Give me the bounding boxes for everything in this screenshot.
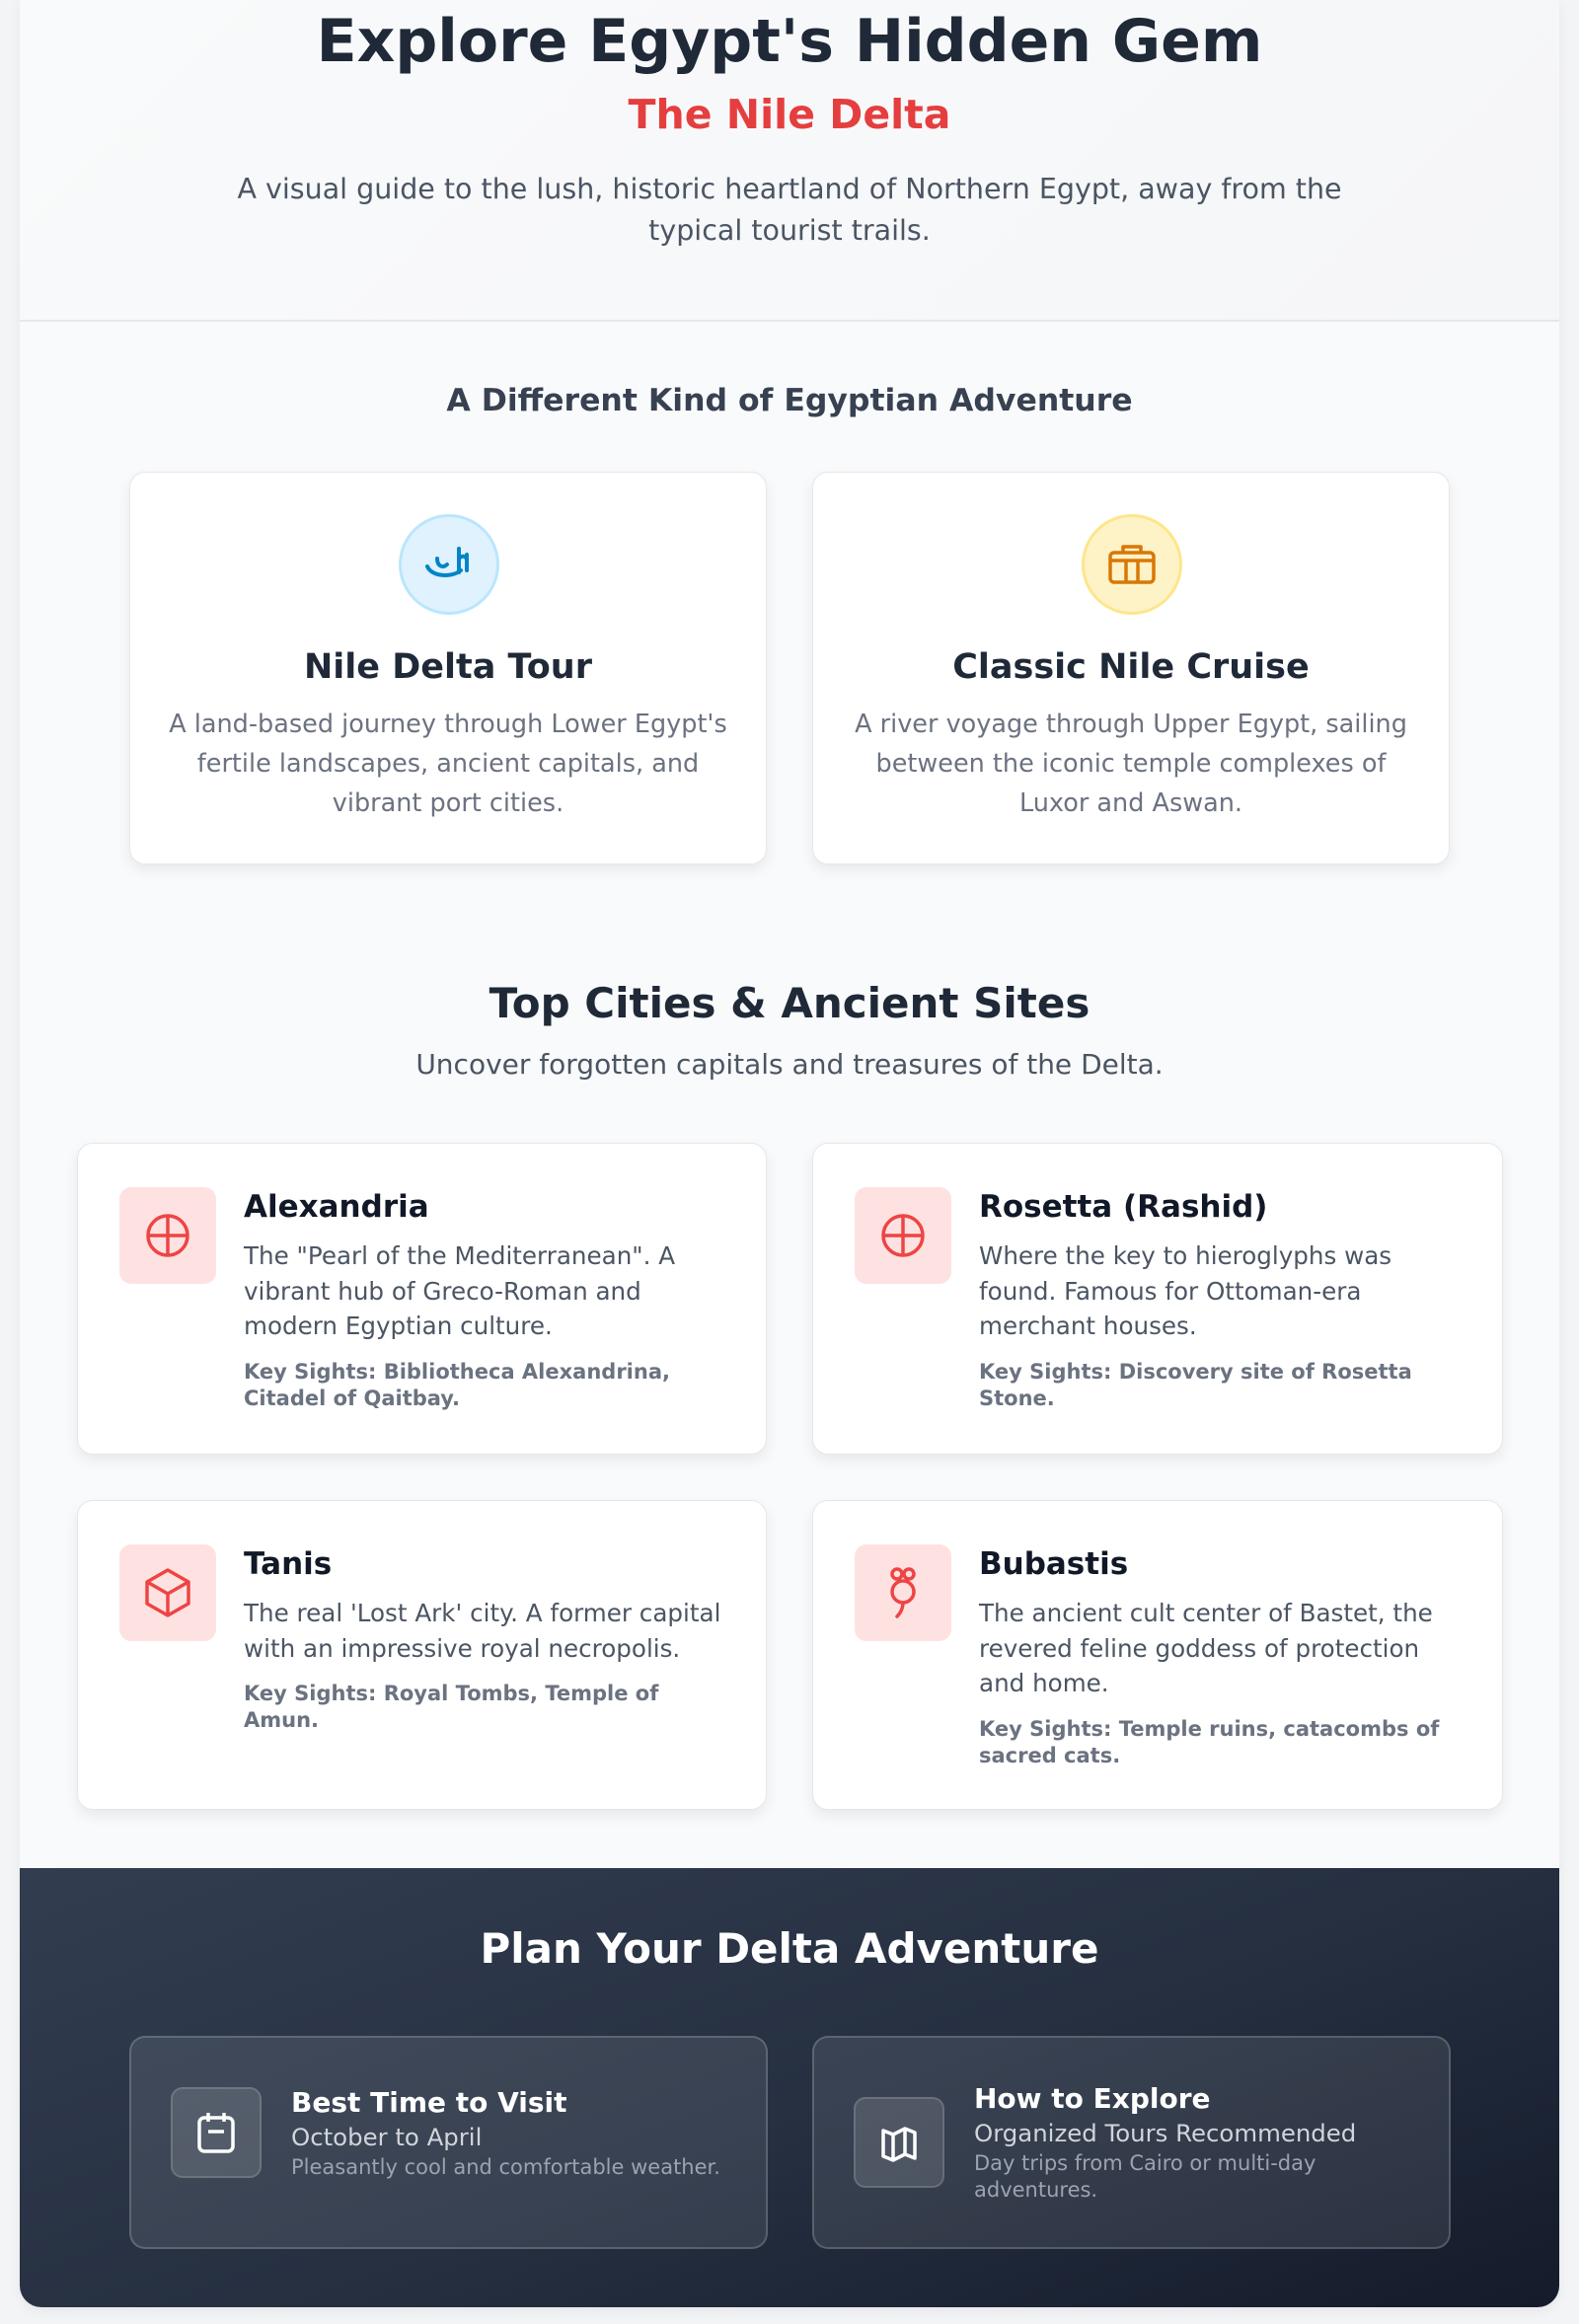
icon <box>119 1187 216 1284</box>
city card: Alexandria <box>77 1143 767 1455</box>
title: Rosetta (Rashid) <box>979 1189 1267 1225</box>
description: The "Pearl of the Mediterranean". A vibrant hub of Greco-Roman and modern Egyptian culture. <box>244 1241 675 1340</box>
description: The ancient cult center of Bastet, the revered feline goddess of protection and home. <box>979 1599 1433 1697</box>
dark section: plan <box>20 1868 1559 2307</box>
icon <box>855 1187 951 1284</box>
icon: map <box>854 2097 944 2188</box>
text: Best Time to Visit <box>291 2086 567 2118</box>
city card: Tanis <box>77 1500 767 1810</box>
header <box>20 0 1559 322</box>
city card: Rosetta <box>812 1143 1503 1455</box>
title: Classic Nile Cruise <box>952 647 1310 687</box>
title: Explore Egypt's Hidden Gem <box>317 7 1262 76</box>
subtitle: The Nile Delta <box>629 91 950 138</box>
text: October to April <box>291 2122 482 2151</box>
key sights: Key Sights: Bibliotheca Alexandrina, Citadel of Qaitbay. <box>244 1360 670 1410</box>
icon: cube <box>119 1544 216 1641</box>
text <box>291 2086 720 2179</box>
dark card: how to explore <box>812 2036 1451 2249</box>
icon: suitcase <box>1082 514 1182 615</box>
intro text: A visual guide to the lush, historic heartland of Northern Egypt, away from the typical tourist trails. <box>237 173 1342 247</box>
text <box>974 2082 1356 2202</box>
title: Nile Delta Tour <box>304 647 592 687</box>
icon: calendar <box>171 2087 262 2178</box>
description: Where the key to hieroglyphs was found. Famous for Ottoman-era merchant houses. <box>979 1241 1391 1340</box>
description: A river voyage through Upper Egypt, sailing between the iconic temple complexes of Luxor and Aswan. <box>855 710 1407 818</box>
dark card: best time <box>129 2036 768 2249</box>
icon: boat <box>399 514 499 615</box>
description: The real 'Lost Ark' city. A former capital with an impressive royal necropolis. <box>244 1599 720 1662</box>
title: Tanis <box>244 1546 332 1582</box>
card: Classic Nile Cruise <box>812 472 1450 864</box>
heading: top cities: Top Cities & Ancient Sites <box>489 979 1090 1027</box>
card: Nile Delta Tour <box>129 472 767 864</box>
text: How to Explore <box>974 2082 1211 2115</box>
title: Alexandria <box>244 1189 429 1225</box>
heading: different adventure: A Different Kind of Egyptian Adventure <box>446 383 1133 418</box>
heading: Plan Your Delta Adventure <box>480 1924 1099 1973</box>
text: Day trips from Cairo or multi-day adventures. <box>974 2151 1316 2202</box>
text: Organized Tours Recommended <box>974 2119 1356 2147</box>
icon: cat goddess <box>855 1544 951 1641</box>
subheading: Uncover forgotten capitals and treasures of the Delta. <box>415 1048 1164 1081</box>
key sights: Key Sights: Discovery site of Rosetta Stone. <box>979 1360 1412 1410</box>
city card: Bubastis <box>812 1500 1503 1810</box>
text: Pleasantly cool and comfortable weather. <box>291 2155 720 2179</box>
key sights: Key Sights: Temple ruins, catacombs of sacred cats. <box>979 1717 1439 1767</box>
description: A land-based journey through Lower Egypt's fertile landscapes, ancient capitals, and vibrant port cities. <box>169 710 727 818</box>
title: Bubastis <box>979 1546 1128 1582</box>
key sights: Key Sights: Royal Tombs, Temple of Amun. <box>244 1682 658 1732</box>
